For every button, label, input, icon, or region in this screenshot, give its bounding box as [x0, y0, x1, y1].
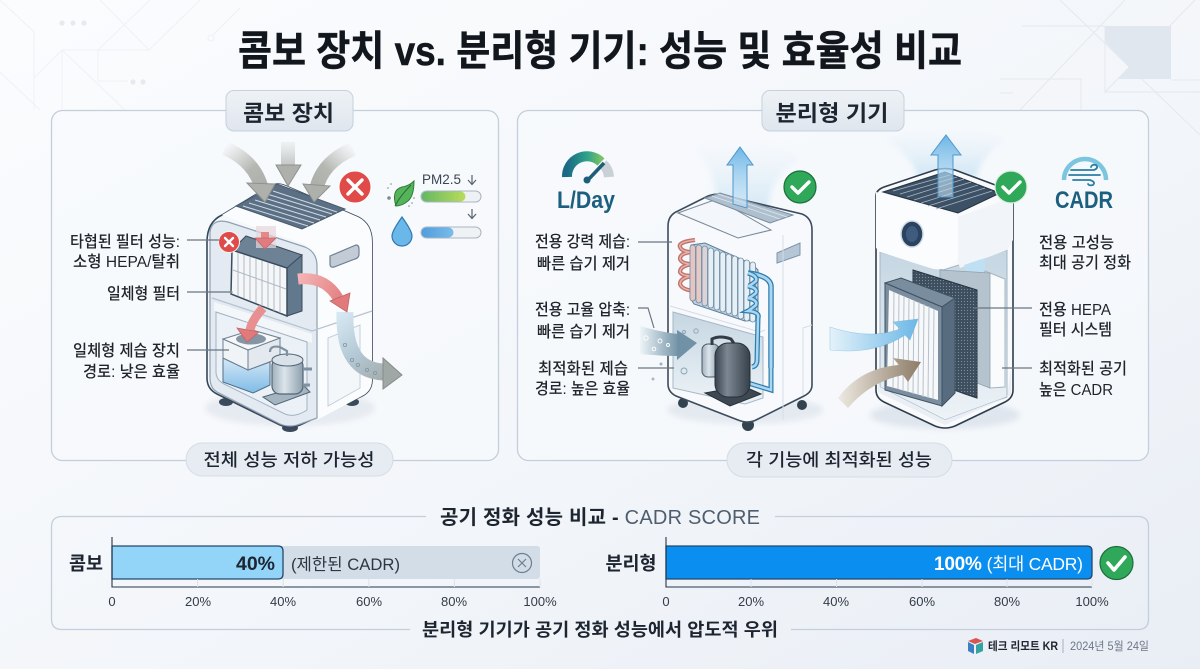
- icon: black compressor: [702, 337, 761, 406]
- label: optimized path: [535, 360, 674, 398]
- label: optimized air: 최적화된 공기: [1039, 360, 1127, 378]
- icon: red x large: [339, 171, 371, 203]
- label: HEPA system: [973, 301, 1112, 339]
- label: optimized path: 최적화된 제습: [538, 360, 628, 378]
- label: dedicated compression: [535, 301, 654, 341]
- icon: L/Day gauge: L/Day: [557, 187, 616, 214]
- icon: L/Day gauge: [557, 156, 616, 214]
- heading: separate devices: 분리형 기기: [776, 101, 888, 126]
- title: 콤보 장치 vs. 분리형 기기: 성능 및 효율성 비교: [238, 28, 962, 74]
- label: integrated dehumidifier: 경로: 낮은 효율: [83, 363, 180, 381]
- bar chart: separate: 0: [662, 594, 670, 609]
- icon: PM2.5 leaf and bar: [387, 171, 481, 207]
- footer pill: overall performance: [186, 443, 393, 476]
- icon: green check purifier: [995, 171, 1027, 203]
- icon: green check chart: [1100, 546, 1133, 580]
- panel: separate devices: [518, 90, 1148, 477]
- label: high purification: [1039, 234, 1131, 272]
- illustration: dehumidifier body: [667, 193, 823, 431]
- label: HEPA system: 전용 HEPA: [1039, 301, 1111, 319]
- icon: incoming humid air arrow: [640, 326, 698, 380]
- label: high purification: 최대 공기 정화: [1039, 254, 1131, 272]
- bar chart: combo: 100%: [523, 594, 557, 609]
- bar chart: separate: 20%: [738, 594, 764, 609]
- icon: PM2.5 leaf and bar: PM2.5: [422, 171, 461, 187]
- heading: combo device: [226, 90, 353, 131]
- label: optimized air: [1002, 360, 1127, 399]
- label: integrated filter: 일체형 필터: [107, 285, 180, 303]
- bar chart: separate: 100% (최대 CADR): [934, 554, 1083, 575]
- icon: dehumidifier water tank: [223, 308, 280, 393]
- bar chart: combo: [69, 537, 557, 609]
- icon: CADR wind: CADR: [1055, 187, 1113, 214]
- bar chart: combo: 80%: [441, 594, 467, 609]
- icon: pink and grey exit airflow: [298, 279, 402, 389]
- credit footer: [968, 638, 1149, 654]
- heading: combo device: 콤보 장치: [243, 101, 334, 126]
- icon: purifier intake arrows: [830, 319, 921, 408]
- illustration: purifier up arrow: [931, 135, 961, 197]
- icon: water drop and bar: [392, 209, 481, 246]
- bar chart: separate: [606, 537, 1109, 609]
- icon: small downward pink arrow: [255, 226, 276, 249]
- label: high purification: 전용 고성능: [1039, 234, 1114, 252]
- label: dedicated dehumidification: 전용 강력 제습:: [535, 233, 630, 251]
- bar chart: combo: 40%: [236, 554, 275, 575]
- heading: separate devices: [762, 90, 904, 131]
- label: optimized path: 경로: 높은 효율: [535, 380, 630, 398]
- label: integrated dehumidifier: [73, 342, 229, 381]
- icon: green check dehumidifier: [784, 171, 816, 203]
- icon: three intake arrows: [225, 142, 353, 202]
- illustration: dehumidifier airflow: [694, 142, 800, 216]
- bar chart: combo: 0: [108, 594, 116, 609]
- bar chart: combo: 20%: [185, 594, 211, 609]
- label: dedicated dehumidification: [535, 233, 672, 273]
- bar chart: separate: 분리형: [606, 553, 656, 574]
- label: HEPA system: 필터 시스템: [1039, 321, 1112, 339]
- icon: filter stack: [885, 270, 1005, 406]
- icon: CADR wind: [1055, 159, 1113, 214]
- credit footer: 테크 리모트 KR: [988, 639, 1059, 653]
- panel: combo device: [52, 90, 498, 476]
- label: integrated dehumidifier: 일체형 제습 장치: [73, 342, 180, 360]
- label: optimized air: 높은 CADR: [1039, 381, 1113, 399]
- bar chart: combo: 60%: [356, 594, 382, 609]
- bar chart: combo: 40%: [270, 594, 296, 609]
- illustration: air purifier body: [870, 168, 1020, 429]
- footer pill: overall performance: 전체 성능 저하 가능성: [204, 450, 374, 470]
- label: dedicated compression: 전용 고율 압축:: [535, 301, 630, 319]
- icon: red x small: [218, 232, 240, 252]
- bar chart: separate: 40%: [823, 594, 849, 609]
- icon: logo: [968, 638, 983, 654]
- credit footer: 2024년 5월 24일: [1070, 639, 1149, 653]
- label: dedicated compression: 빠른 습기 제거: [537, 323, 630, 341]
- footer pill: optimized performance: [727, 443, 952, 477]
- label: compromised filter: 소형 HEPA/탈취: [73, 253, 180, 271]
- icon: integrated filter: [231, 236, 302, 316]
- bar chart: separate: 100%: [1075, 594, 1109, 609]
- bar chart: combo: (제한된 CADR): [291, 555, 400, 574]
- footer pill: optimized performance: 각 기능에 최적화된 성능: [746, 450, 932, 470]
- caption: conclusion: 분리형 기기가 공기 정화 성능에서 압도적 우위: [422, 620, 778, 640]
- bar chart: separate: 80%: [994, 594, 1020, 609]
- panel: CADR comparison: [52, 506, 1148, 640]
- label: compromised filter: 타협된 필터 성능:: [70, 233, 180, 251]
- label: compromised filter: [70, 233, 219, 271]
- label: integrated filter: [107, 285, 232, 303]
- illustration: combo unit body: [205, 184, 375, 432]
- illustration: dehumidifier up arrow: [727, 147, 753, 208]
- illustration: purifier airflow: [885, 128, 1005, 178]
- bar chart: combo: 콤보: [69, 553, 103, 574]
- icon: compressor: [263, 347, 312, 405]
- icon: coil and fins: [680, 240, 771, 390]
- bar chart: separate: 60%: [909, 594, 935, 609]
- label: dedicated dehumidification: 빠른 습기 제거: [537, 255, 630, 273]
- heading: chart title: 공기 정화 성능 비교 - CADR SCORE: [440, 506, 760, 529]
